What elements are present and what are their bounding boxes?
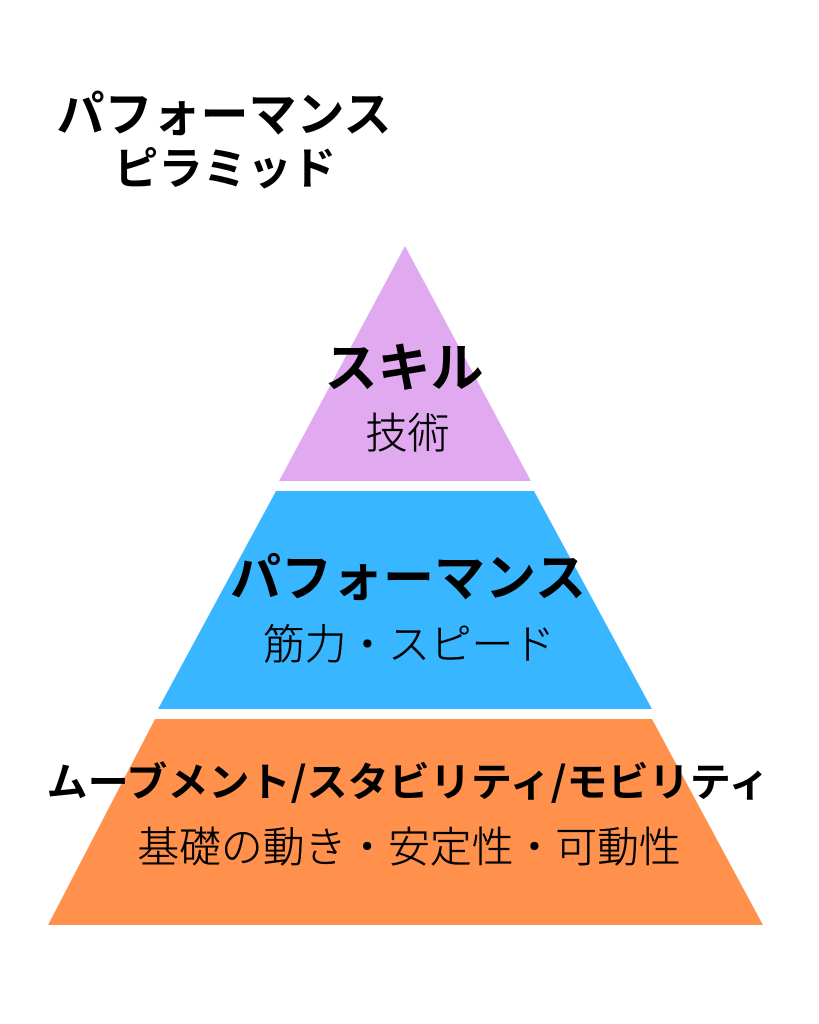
panel: skill tier [279, 246, 531, 481]
title: ピラミッド [114, 145, 336, 194]
panel: performance tier [158, 491, 652, 709]
performance subtext: 筋力・スピード [263, 621, 555, 668]
performance heading: パフォーマンス [230, 550, 586, 607]
panel: movement tier [46, 719, 770, 925]
skill heading: スキル [324, 340, 484, 398]
skill subtext: 技術 [365, 410, 450, 457]
title [56, 89, 392, 194]
title: パフォーマンス [56, 89, 392, 142]
movement subtext: 基礎の動き・安定性・可動性 [137, 824, 681, 871]
movement heading: ムーブメント/スタビリティ/モビリティ [46, 750, 770, 808]
